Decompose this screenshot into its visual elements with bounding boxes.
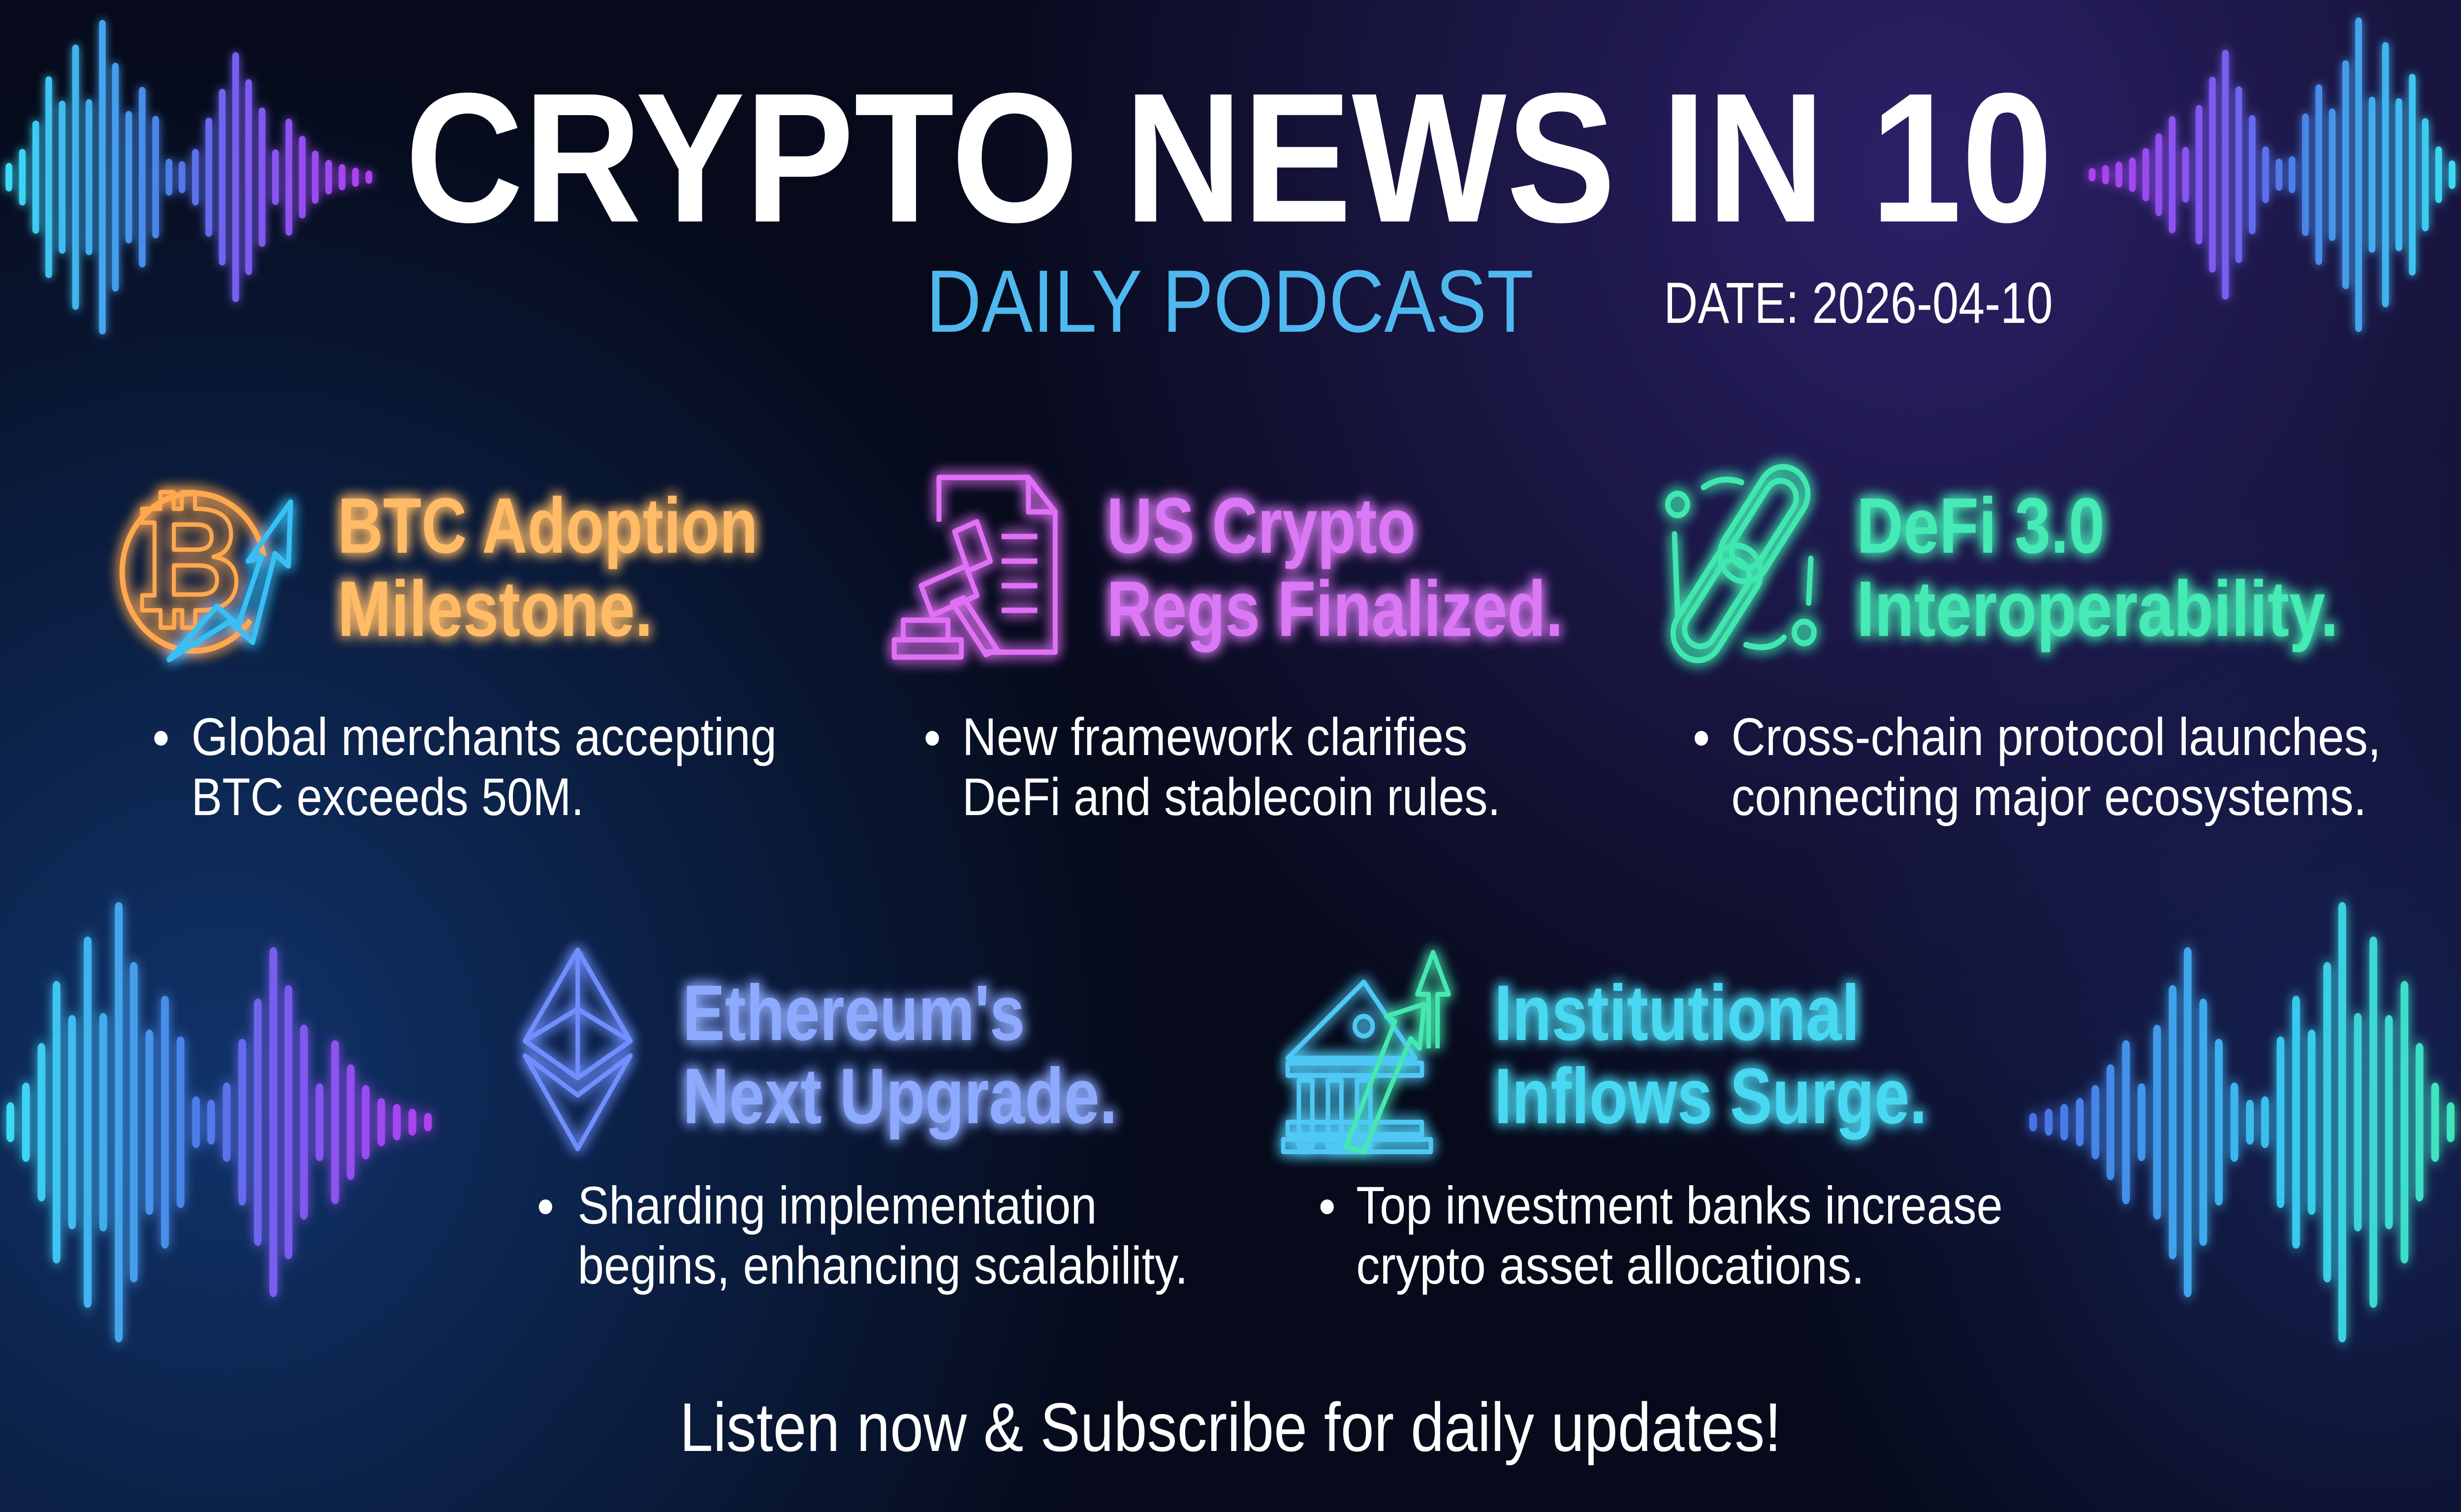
panel: Institutional inflows — [1283, 952, 2003, 1295]
icon: bitcoin with rising arrow — [122, 477, 290, 660]
heading: DeFi 3.0: Interoperability. — [1857, 566, 2338, 653]
date: DATE: 2026-04-10 — [1664, 270, 2053, 335]
icon: chain links — [1664, 456, 1817, 671]
text: institutional bullet: crypto asset allocations. — [1356, 1236, 1864, 1295]
heading: US crypto regs: US Crypto — [1106, 482, 1416, 570]
heading: US crypto regs — [1106, 482, 1563, 653]
icon: bitcoin with rising arrow: ₿ — [133, 477, 243, 642]
heading: institutional inflows — [1494, 970, 1927, 1140]
text: institutional bullet — [1321, 1176, 2003, 1295]
heading: BTC adoption: BTC Adoption — [338, 482, 758, 570]
text: Ethereum bullet — [539, 1176, 1188, 1295]
footer call to action: Listen now & Subscribe for daily updates! — [680, 1389, 1781, 1466]
title: CRYPTO NEWS IN 10 — [405, 55, 2053, 261]
subtitle: daily podcast: DAILY PODCAST — [926, 252, 1534, 351]
icon: document with gavel — [894, 477, 1055, 657]
heading: institutional inflows: Inflows Surge. — [1494, 1053, 1927, 1140]
panel: US crypto regs — [894, 477, 1563, 826]
text: BTC bullet: Global merchants accepting — [191, 707, 777, 766]
text: regs bullet: DeFi and stablecoin rules. — [962, 767, 1501, 826]
waveform: bottom left — [10, 907, 428, 1337]
panel: DeFi interoperability — [1664, 456, 2381, 826]
panel: Ethereum upgrade — [525, 950, 1188, 1295]
heading: DeFi 3.0 — [1857, 482, 2338, 653]
icon: ethereum diamond — [525, 950, 631, 1149]
heading: US crypto regs: Regs Finalized. — [1106, 566, 1563, 653]
text: Ethereum bullet: begins, enhancing scalability. — [578, 1236, 1188, 1295]
waveform: top left — [9, 24, 369, 331]
text: BTC bullet: BTC exceeds 50M. — [191, 767, 584, 826]
heading: BTC adoption: Milestone. — [338, 566, 653, 653]
heading: DeFi 3.0: DeFi 3.0 — [1857, 482, 2105, 570]
panel: BTC adoption — [122, 477, 777, 826]
text: DeFi bullet — [1695, 707, 2381, 826]
text: BTC bullet — [154, 707, 777, 826]
heading: Ethereum's next upgrade: Ethereum's — [683, 970, 1025, 1057]
heading: institutional inflows: Institutional — [1494, 970, 1860, 1057]
text: DeFi bullet: Cross-chain protocol launches, — [1731, 707, 2381, 766]
icon: bank with arrows — [1283, 952, 1449, 1152]
heading: BTC adoption — [338, 482, 758, 653]
waveform: bottom right — [2033, 907, 2451, 1337]
text: Ethereum bullet: Sharding implementation — [578, 1176, 1097, 1235]
text: DeFi bullet: connecting major ecosystems. — [1731, 767, 2366, 826]
heading: Ethereum's next upgrade: Next Upgrade. — [683, 1053, 1117, 1140]
text: regs bullet: New framework clarifies — [962, 707, 1467, 766]
text: regs bullet — [925, 707, 1501, 826]
text: institutional bullet: Top investment banks increase — [1356, 1176, 2003, 1235]
waveform: top right — [2092, 21, 2452, 328]
heading: Ethereum's next upgrade — [683, 970, 1117, 1140]
